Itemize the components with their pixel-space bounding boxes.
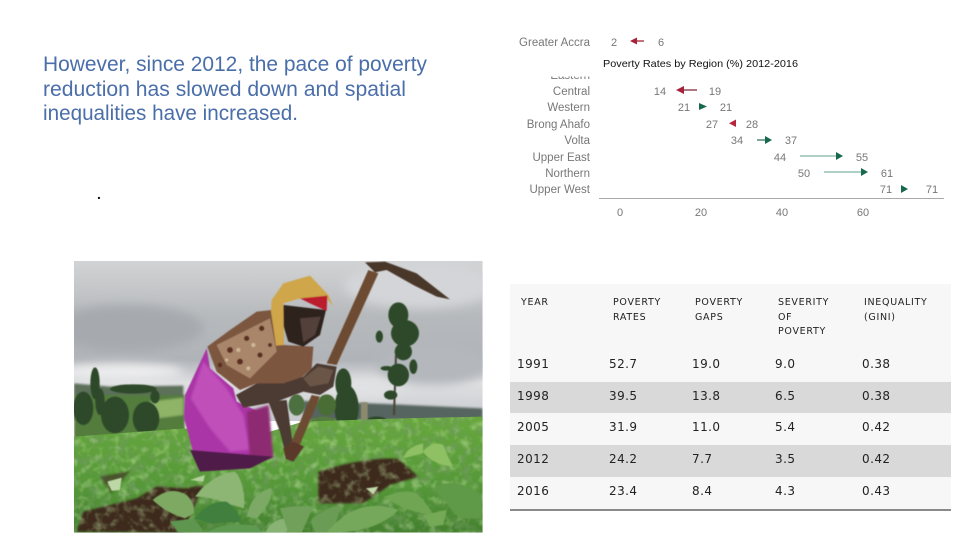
table rows: 19.0 bbox=[692, 357, 721, 371]
table rows: 24.2 bbox=[609, 452, 638, 466]
blouse bbox=[207, 310, 313, 390]
region labels: Northern bbox=[545, 168, 590, 180]
table rows: 5.4 bbox=[775, 420, 795, 434]
table header: INEQUALITY bbox=[864, 297, 928, 308]
title: reduction has slowed down and spatial bbox=[43, 78, 406, 101]
x axis bbox=[599, 198, 944, 219]
value labels: 14 bbox=[654, 86, 666, 98]
value labels: 71 bbox=[926, 184, 938, 196]
dumbbell chart: poverty rates by region bbox=[519, 37, 944, 219]
value labels: 55 bbox=[856, 152, 868, 164]
data table: poverty indicators by year bbox=[510, 284, 951, 511]
shaded row 2012 bbox=[510, 445, 951, 477]
figure bbox=[207, 262, 450, 462]
foliage mottling, dark bbox=[74, 415, 483, 533]
value labels: 50 bbox=[798, 168, 810, 180]
table rows: 0.42 bbox=[862, 452, 891, 466]
value labels: 71 bbox=[880, 184, 892, 196]
value labels: 6 bbox=[658, 37, 664, 49]
field bbox=[74, 417, 483, 533]
table header: OF bbox=[778, 312, 792, 323]
arm behind bbox=[268, 400, 294, 452]
region labels: Volta bbox=[564, 135, 591, 147]
table rows: 0.38 bbox=[862, 357, 891, 371]
table rows: 2016 bbox=[517, 484, 549, 498]
arrows bbox=[630, 38, 908, 193]
value labels: 2 bbox=[611, 37, 617, 49]
region labels bbox=[519, 37, 591, 196]
table rows: 1998 bbox=[517, 389, 549, 403]
chart title: Poverty Rates by Region (%) 2012-2016 bbox=[603, 58, 798, 70]
foreground leaves bbox=[107, 443, 482, 533]
table header bbox=[520, 297, 928, 337]
value labels bbox=[611, 37, 938, 196]
value labels: 61 bbox=[881, 168, 893, 180]
table rows: 9.0 bbox=[775, 357, 795, 371]
table header: POVERTY bbox=[613, 297, 661, 308]
value labels: 28 bbox=[746, 119, 758, 131]
x axis: 20 bbox=[695, 207, 707, 219]
shaded row 1998 bbox=[510, 382, 951, 413]
table rows: 11.0 bbox=[692, 420, 721, 434]
lower hand bbox=[283, 442, 304, 462]
table rows: 2005 bbox=[517, 420, 549, 434]
region labels: Central bbox=[553, 86, 590, 98]
table header: YEAR bbox=[520, 297, 549, 308]
table header: GAPS bbox=[695, 312, 723, 323]
table header: SEVERITY bbox=[778, 297, 829, 308]
region labels: Upper East bbox=[532, 152, 591, 164]
table rows: 6.5 bbox=[775, 389, 795, 403]
table rows: 1991 bbox=[517, 357, 549, 371]
region labels: Upper West bbox=[529, 184, 591, 196]
title: However, since 2012, the pace of poverty bbox=[43, 53, 427, 76]
region labels: Western bbox=[547, 102, 590, 114]
table rows: 4.3 bbox=[775, 484, 795, 498]
title bbox=[43, 53, 427, 125]
table rows bbox=[517, 357, 891, 498]
soil patches bbox=[77, 459, 418, 533]
table rows: 3.5 bbox=[775, 452, 795, 466]
head bbox=[283, 305, 326, 347]
stray period: . bbox=[97, 186, 101, 202]
hoe handle bbox=[327, 270, 378, 365]
table rows: 0.43 bbox=[862, 484, 891, 498]
table rows: 0.38 bbox=[862, 389, 891, 403]
table rows: 7.7 bbox=[692, 452, 712, 466]
value labels: 37 bbox=[785, 135, 797, 147]
table rows: 8.4 bbox=[692, 484, 712, 498]
table rows: 13.8 bbox=[692, 389, 721, 403]
forearm bbox=[236, 363, 337, 408]
background landscape bbox=[74, 383, 483, 438]
value labels: 19 bbox=[709, 86, 721, 98]
x axis: 0 bbox=[617, 207, 623, 219]
table rows: 31.9 bbox=[609, 420, 638, 434]
table header: POVERTY bbox=[778, 326, 826, 337]
photo: woman hoeing a field bbox=[50, 261, 497, 533]
value labels: 44 bbox=[774, 152, 786, 164]
value labels: 21 bbox=[678, 102, 690, 114]
x axis: 60 bbox=[857, 207, 869, 219]
foliage mottling, light bbox=[74, 415, 483, 533]
hoe blade bbox=[365, 262, 450, 299]
value labels: 34 bbox=[731, 135, 743, 147]
region labels: Greater Accra bbox=[519, 37, 591, 49]
title: inequalities have increased. bbox=[43, 102, 298, 125]
table rows: 39.5 bbox=[609, 389, 638, 403]
x axis: 40 bbox=[776, 207, 788, 219]
table header: (GINI) bbox=[864, 312, 896, 323]
region labels: Brong Ahafo bbox=[527, 119, 590, 131]
table rows: 2012 bbox=[517, 452, 549, 466]
table header: RATES bbox=[613, 312, 646, 323]
post bbox=[361, 402, 368, 426]
value labels: 27 bbox=[706, 119, 718, 131]
table header: POVERTY bbox=[695, 297, 743, 308]
sky bbox=[74, 261, 483, 421]
table rows: 0.42 bbox=[862, 420, 891, 434]
table rows: 23.4 bbox=[609, 484, 638, 498]
value labels: 21 bbox=[720, 102, 732, 114]
region labels: Eastern bbox=[550, 70, 590, 82]
table rows: 52.7 bbox=[609, 357, 638, 371]
table bottom rule bbox=[510, 509, 951, 511]
table background bbox=[510, 284, 951, 510]
background trees bbox=[73, 302, 419, 435]
headscarf bbox=[271, 276, 333, 346]
skirt bbox=[184, 348, 273, 472]
